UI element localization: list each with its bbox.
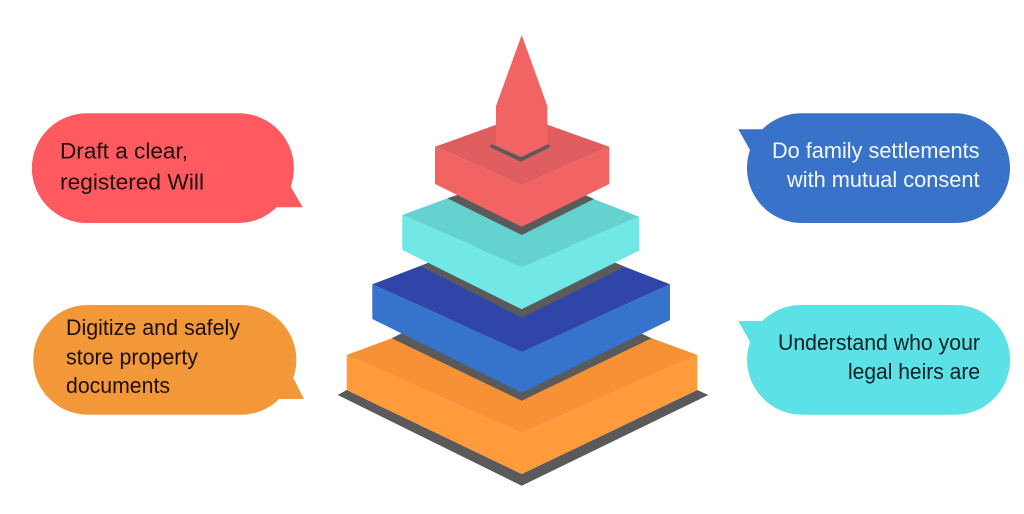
callout text: Digitize and safely [66,315,240,340]
spire shadow [489,144,551,162]
callout: digitize documents [33,305,304,415]
ground shadow [338,390,708,486]
blue layer [372,227,670,393]
callout text: with mutual consent [786,167,980,192]
spire [496,35,547,157]
teal layer [402,171,639,309]
shadow under red layer [447,190,594,235]
orange layer [347,290,697,474]
shadow under blue layer [392,320,652,401]
callout: legal heirs [738,305,1010,415]
callout text: Draft a clear, [60,138,188,164]
shadow under teal layer [420,250,625,318]
callout: family settlements [738,113,1010,223]
callout text: store property [66,344,198,370]
callout text: legal heirs are [848,359,980,384]
red layer [435,116,609,227]
pyramid [338,35,708,486]
callout text: Do family settlements [772,138,980,163]
callout text: Understand who your [778,330,980,355]
callout text: documents [66,373,170,398]
callout: draft a will [32,113,303,223]
callout text: registered Will [60,170,204,194]
